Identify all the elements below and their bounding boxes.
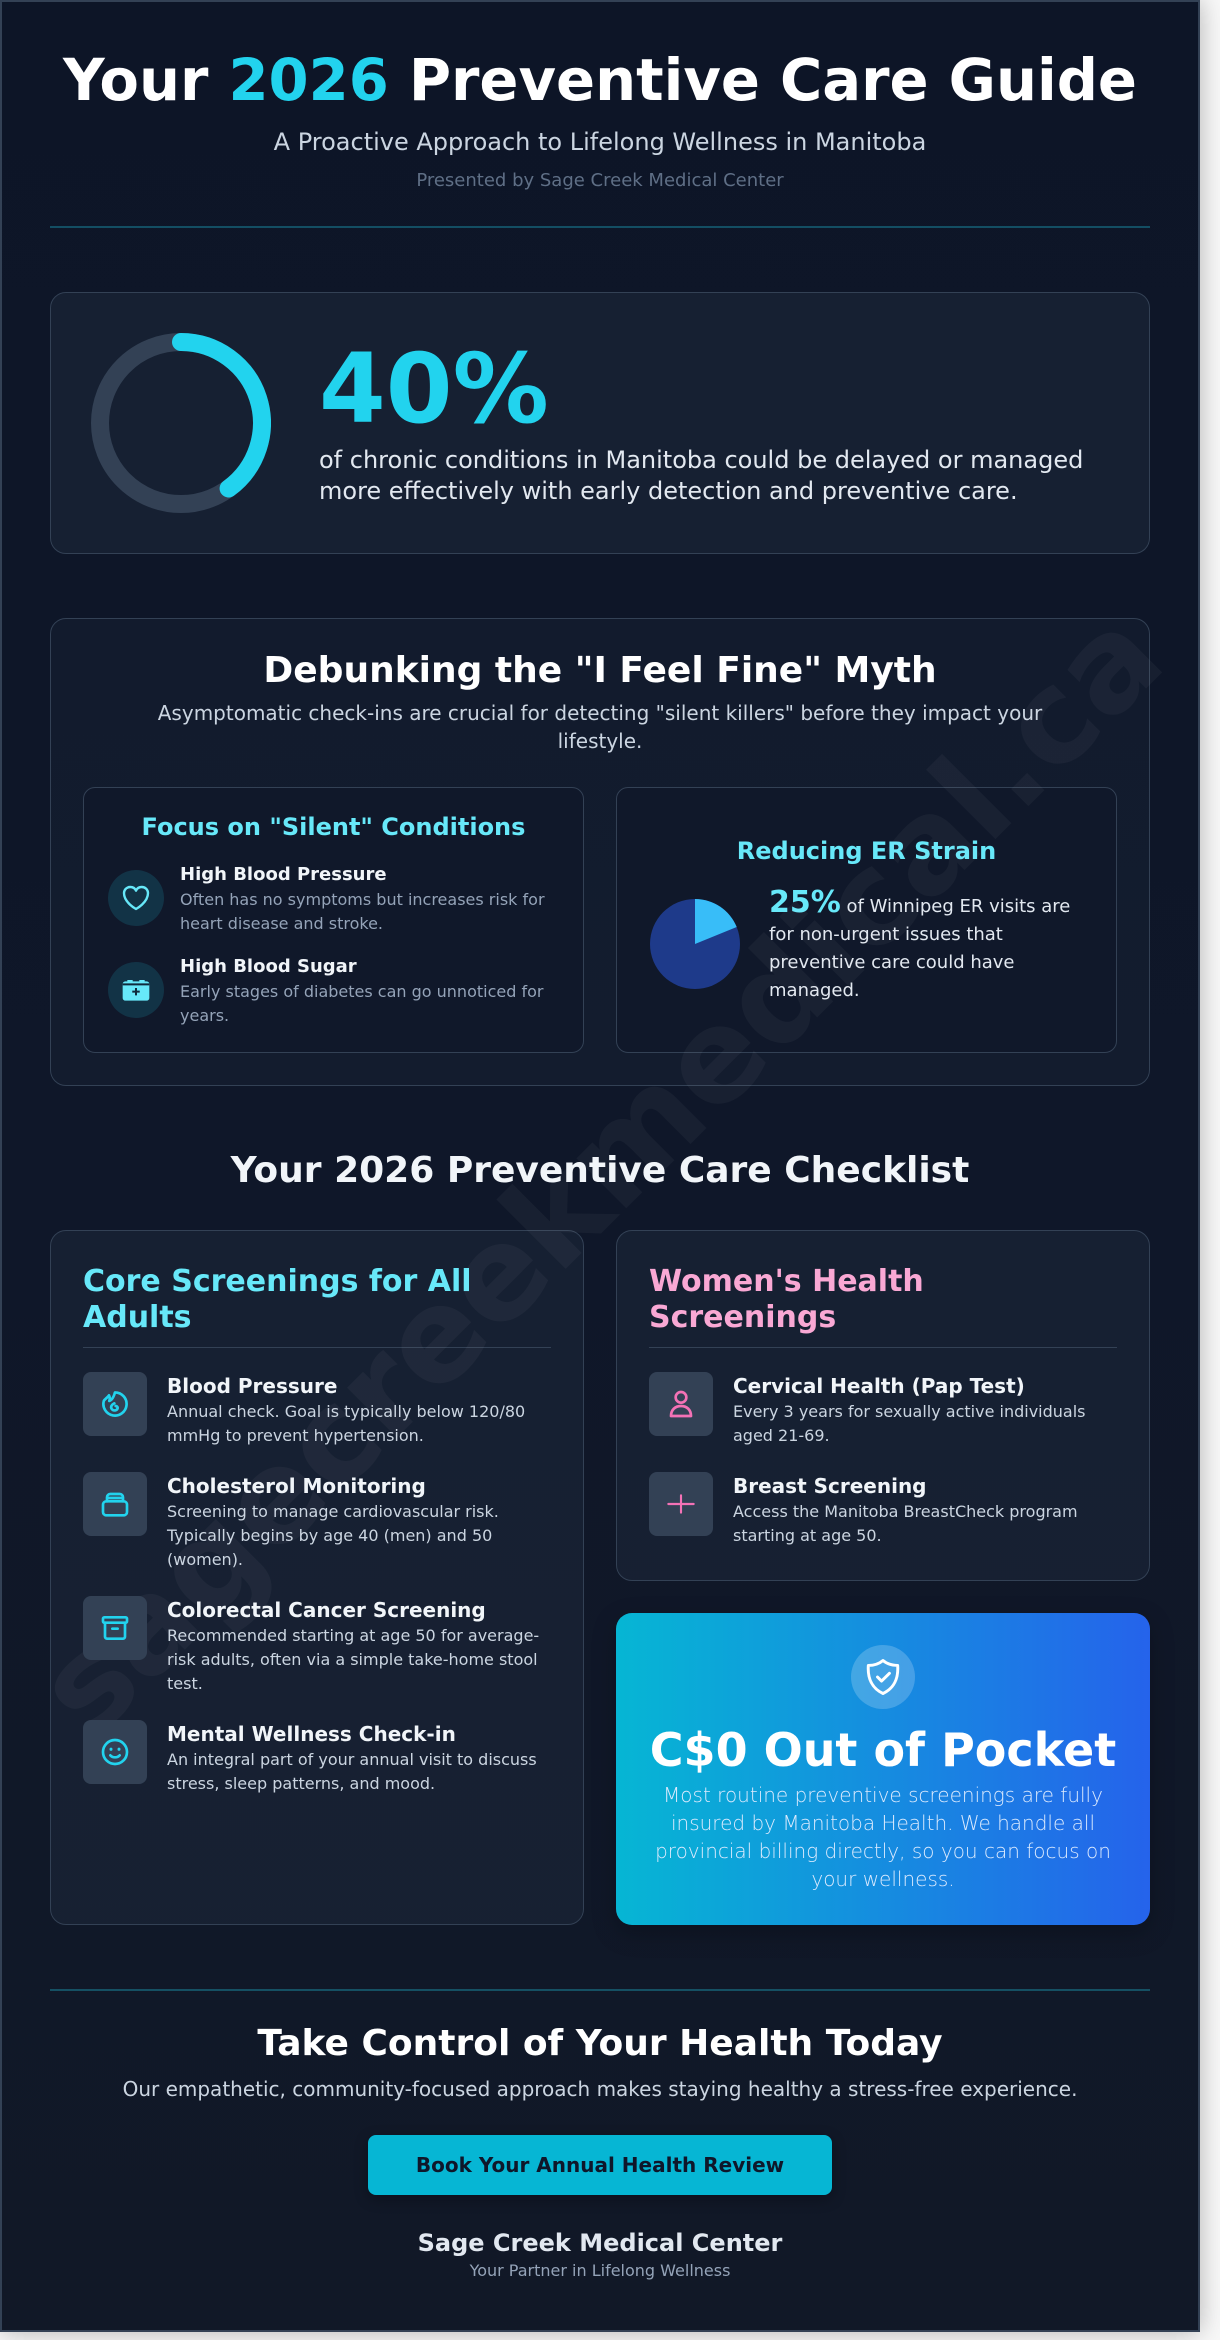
ER statistic text: for non-urgent issues that bbox=[769, 924, 1003, 945]
presenter line: Presented by Sage Creek Medical Center bbox=[416, 170, 784, 191]
icon: mental wellness bbox=[83, 1720, 147, 1784]
item: cholesterol: (women). bbox=[167, 1550, 243, 1569]
item: breast screening: starting at age 50. bbox=[733, 1526, 882, 1545]
description: provincial billing directly, so you can focus on bbox=[655, 1839, 1111, 1863]
item: high blood sugar: High Blood Sugar bbox=[180, 956, 357, 977]
section heading: Debunking the "I Feel Fine" Myth bbox=[263, 650, 937, 691]
icon: shield check bbox=[851, 1645, 915, 1709]
panel: 40% statistic bbox=[50, 292, 1150, 554]
item: high blood pressure: heart disease and stroke. bbox=[180, 914, 383, 933]
description: your wellness. bbox=[811, 1867, 955, 1891]
item: colorectal: risk adults, often via a simple take-home stool bbox=[167, 1650, 538, 1669]
item: blood pressure bbox=[167, 1374, 525, 1445]
item: high blood pressure bbox=[180, 864, 545, 933]
item: high blood sugar: years. bbox=[180, 1006, 229, 1025]
statistic description bbox=[319, 446, 1083, 505]
section intro bbox=[158, 701, 1042, 753]
item: cholesterol: Screening to manage cardiovascular risk. bbox=[167, 1502, 499, 1521]
panel heading: Core Screenings for All bbox=[83, 1264, 472, 1299]
description bbox=[655, 1783, 1111, 1891]
item: high blood sugar: Early stages of diabetes can go unnoticed for bbox=[180, 982, 543, 1001]
item: high blood sugar bbox=[180, 956, 544, 1025]
ER statistic text: 25% of Winnipeg ER visits are bbox=[769, 885, 1070, 920]
icon: colorectal bbox=[83, 1596, 147, 1660]
panel: women's health bbox=[616, 1230, 1150, 1581]
section intro: lifestyle. bbox=[558, 729, 642, 753]
description: Most routine preventive screenings are fully bbox=[663, 1783, 1103, 1807]
description: insured by Manitoba Health. We handle all bbox=[671, 1811, 1095, 1835]
item: high blood pressure: Often has no symptoms but increases risk for bbox=[180, 890, 545, 909]
item: cervical health: Cervical Health (Pap Test) bbox=[733, 1374, 1025, 1398]
big number: 40% bbox=[319, 333, 549, 445]
subtitle: A Proactive Approach to Lifelong Wellness in Manitoba bbox=[274, 128, 926, 156]
panel heading: Women's Health bbox=[649, 1264, 924, 1299]
donut chart: 40 percent bbox=[91, 333, 271, 513]
item: mental wellness: stress, sleep patterns, and mood. bbox=[167, 1774, 435, 1793]
item: blood pressure: mmHg to prevent hypertension. bbox=[167, 1426, 424, 1445]
item: breast screening bbox=[733, 1474, 1078, 1545]
statistic description: of chronic conditions in Manitoba could be delayed or managed bbox=[319, 446, 1083, 474]
button: Book Your Annual Health Review bbox=[416, 2153, 784, 2177]
checklist heading: Your 2026 Preventive Care Checklist bbox=[231, 1150, 969, 1191]
card heading: Reducing ER Strain bbox=[737, 837, 996, 865]
call to action text: Our empathetic, community-focused approach makes staying healthy a stress-free experience. bbox=[123, 2077, 1077, 2101]
item: mental wellness bbox=[167, 1722, 537, 1793]
ER statistic text bbox=[769, 885, 1070, 1001]
panel: debunking myth bbox=[50, 618, 1150, 1086]
icon: plus bbox=[649, 1472, 713, 1536]
ER statistic text: preventive care could have bbox=[769, 952, 1015, 973]
icon: person bbox=[649, 1372, 713, 1436]
footer brand: Sage Creek Medical Center bbox=[418, 2229, 782, 2257]
item: cervical health: aged 21-69. bbox=[733, 1426, 830, 1445]
item: blood pressure: Blood Pressure bbox=[167, 1374, 337, 1398]
headline: C$0 Out of Pocket bbox=[650, 1723, 1116, 1777]
item: cholesterol: Cholesterol Monitoring bbox=[167, 1474, 426, 1498]
icon: blood pressure bbox=[83, 1372, 147, 1436]
card: silent conditions bbox=[83, 787, 584, 1053]
icon: cholesterol bbox=[83, 1472, 147, 1536]
pie chart bbox=[650, 899, 740, 989]
call to action heading: Take Control of Your Health Today bbox=[257, 2023, 943, 2064]
title: Your 2026 Preventive Care Guide bbox=[63, 47, 1137, 114]
panel: core screenings bbox=[50, 1230, 584, 1925]
item: cervical health: Every 3 years for sexually active individuals bbox=[733, 1402, 1085, 1421]
item: breast screening: Access the Manitoba BreastCheck program bbox=[733, 1502, 1078, 1521]
item: cervical health bbox=[733, 1374, 1085, 1445]
item: colorectal: test. bbox=[167, 1674, 203, 1693]
panel heading: Adults bbox=[83, 1300, 192, 1335]
panel heading: Screenings bbox=[649, 1300, 836, 1335]
watermark: sagecreekmedical.ca bbox=[8, 581, 1191, 1764]
card heading: Focus on "Silent" Conditions bbox=[142, 813, 525, 841]
item: cholesterol: Typically begins by age 40 (men) and 50 bbox=[167, 1526, 492, 1545]
item: colorectal bbox=[167, 1598, 539, 1693]
section intro: Asymptomatic check-ins are crucial for detecting "silent killers" before they impact your bbox=[158, 701, 1042, 725]
card: ER strain bbox=[616, 787, 1117, 1053]
panel heading bbox=[649, 1264, 924, 1335]
statistic description: more effectively with early detection and preventive care. bbox=[319, 477, 1018, 505]
item: colorectal: Colorectal Cancer Screening bbox=[167, 1598, 486, 1622]
item: blood pressure: Annual check. Goal is typically below 120/80 bbox=[167, 1402, 525, 1421]
icon: medical kit bbox=[108, 962, 164, 1018]
icon: heart bbox=[108, 870, 164, 926]
item: colorectal: Recommended starting at age 50 for average- bbox=[167, 1626, 539, 1645]
item: mental wellness: Mental Wellness Check-in bbox=[167, 1722, 456, 1746]
item: high blood pressure: High Blood Pressure bbox=[180, 864, 387, 885]
item: mental wellness: An integral part of your annual visit to discuss bbox=[167, 1750, 537, 1769]
item: breast screening: Breast Screening bbox=[733, 1474, 926, 1498]
button bbox=[368, 2135, 832, 2195]
ER statistic text: managed. bbox=[769, 980, 860, 1001]
footer tagline: Your Partner in Lifelong Wellness bbox=[470, 2261, 730, 2280]
item: cholesterol bbox=[166, 1474, 499, 1569]
panel heading bbox=[83, 1264, 472, 1335]
header bbox=[62, 47, 1137, 191]
panel: C$0 out of pocket bbox=[616, 1613, 1150, 1925]
